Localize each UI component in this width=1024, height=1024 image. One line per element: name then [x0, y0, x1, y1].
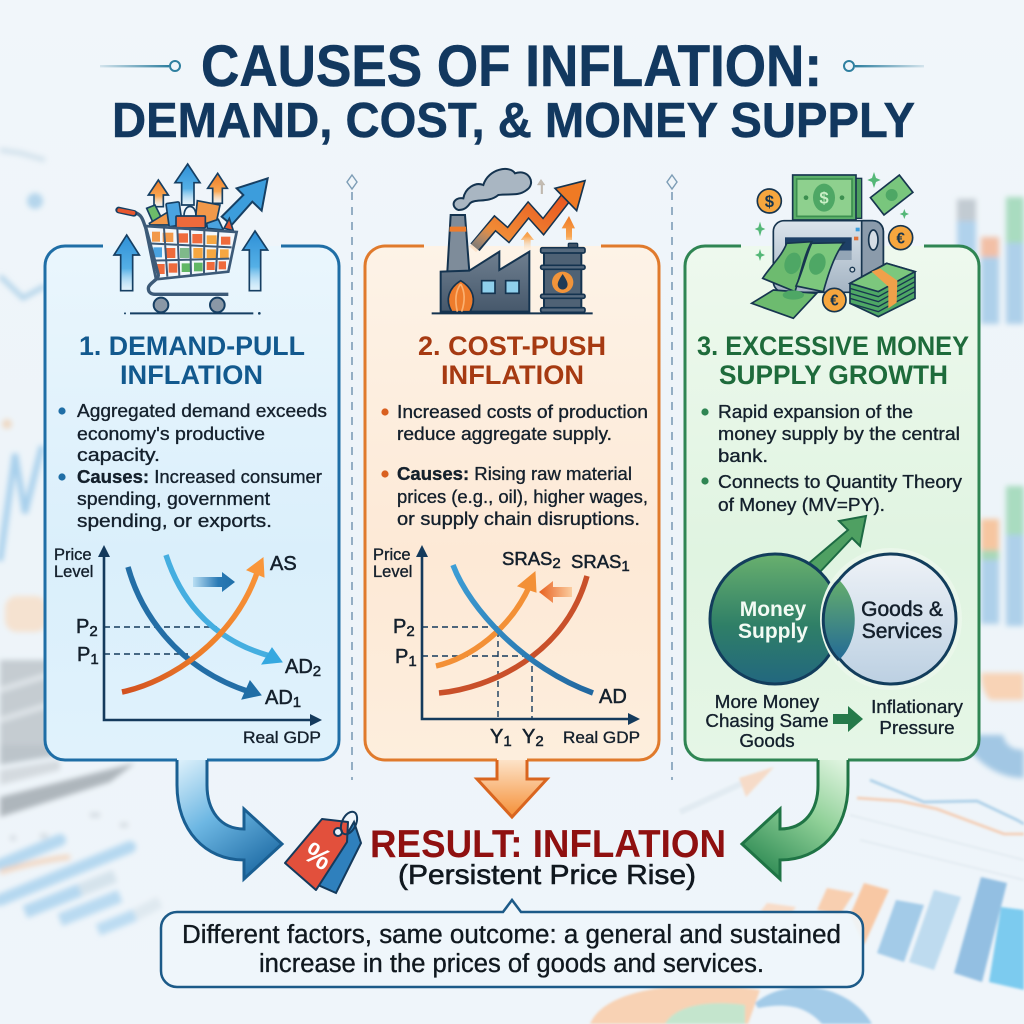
text block: definition and theory: money supply by the central [718, 423, 960, 444]
text block: definition and causes: capacity. [77, 444, 160, 465]
panel: demand-pull inflation [45, 164, 339, 760]
chart: SRAS shift: Y [490, 726, 503, 748]
title [100, 34, 924, 148]
text block: definition and causes: Causes: Increased consumer [77, 466, 322, 487]
faint arrow [680, 782, 745, 812]
chart: SRAS shift: 2 [535, 733, 544, 750]
dashed column dividers [347, 175, 677, 780]
chart: SRAS shift: P [393, 616, 406, 638]
chart: AD shift: AD [285, 656, 313, 678]
callout: more money chasing same goods leads to inflationary pressure: Goods [739, 730, 795, 751]
callout: summary: Different factors, same outcome: a general and sustained [182, 921, 841, 949]
text block: definition and theory: Rapid expansion of the [718, 401, 913, 422]
arrow: money supply to result [742, 760, 848, 879]
line chart [870, 780, 1024, 824]
diagram: money supply vs goods and services [710, 516, 962, 690]
chart: SRAS shift: SRAS [502, 548, 552, 569]
icon: money printer with bills and coins [752, 172, 915, 318]
diagram: money supply vs goods and services: Services [862, 620, 942, 643]
title: CAUSES OF INFLATION: [201, 34, 822, 99]
chart: AD shift [54, 545, 322, 747]
diagram: money supply vs goods and services: Goods & [861, 598, 943, 621]
icon: factory, oil barrel and rising cost arrow [432, 169, 593, 313]
chart: SRAS shift: 1 [408, 653, 417, 670]
chart: SRAS shift: SRAS [571, 551, 621, 572]
text block: definition and causes [58, 400, 327, 531]
callout: summary: increase in the prices of goods and services. [259, 950, 764, 978]
panel: excessive money supply growth [685, 172, 979, 760]
icon: shopping cart with rising arrows [114, 164, 268, 315]
chart: AD shift: P [77, 644, 90, 666]
text block: definition and causes: or supply chain disruptions. [397, 508, 640, 529]
text block: definition and causes: Aggregated demand exceeds [77, 400, 327, 421]
chart: AD shift: P [76, 616, 89, 638]
text block: definition and causes: Increased costs of production [397, 401, 648, 422]
chart: SRAS shift: P [395, 646, 408, 668]
text block: definition and causes: reduce aggregate supply. [397, 423, 612, 444]
text block: definition and causes: economy's productive [77, 423, 265, 444]
heading: 1. DEMAND-PULL [79, 331, 305, 361]
text block: definition and causes: spending, or exports. [77, 510, 272, 531]
text block: definition and causes: Causes: Rising raw material [397, 463, 632, 484]
text block: definition and causes: spending, government [77, 488, 271, 509]
chart: SRAS shift: Price [373, 546, 411, 564]
diagram: money supply vs goods and services: Money [740, 598, 807, 621]
icon: price tag with percent: % [298, 836, 337, 877]
diagram: money supply vs goods and services: Supply [738, 620, 808, 643]
heading: INFLATION [120, 360, 263, 390]
chart: SRAS shift [373, 545, 640, 750]
panel: cost-push inflation [365, 169, 659, 760]
chart: SRAS shift: 2 [406, 623, 415, 640]
icon: money printer with bills and coins: $ [819, 188, 829, 207]
callout: more money chasing same goods leads to inflationary pressure [705, 691, 964, 751]
chart: AD shift: 2 [313, 663, 321, 680]
chart: SRAS shift: 1 [503, 733, 512, 750]
chart: SRAS shift: 2 [552, 555, 561, 572]
heading: INFLATION [441, 360, 584, 390]
icon: money printer with bills and coins: € [896, 230, 905, 247]
icon: price tag with percent [285, 809, 361, 893]
callout: more money chasing same goods leads to inflationary pressure: Pressure [879, 717, 955, 738]
chart: SRAS shift: Y [522, 726, 535, 748]
icon: money printer with bills and coins: $ [765, 192, 775, 211]
chart: AD shift: 1 [90, 651, 99, 668]
bottom-right bars [817, 888, 854, 915]
text block: definition and theory: Connects to Quantity Theory [718, 471, 963, 492]
icon: money printer with bills and coins: € [830, 293, 839, 310]
result heading: (Persistent Price Rise) [398, 859, 696, 890]
text block: definition and causes [381, 401, 648, 529]
heading: SUPPLY GROWTH [719, 360, 948, 390]
chart: SRAS shift: AD [599, 686, 627, 708]
title: DEMAND, COST, & MONEY SUPPLY [112, 94, 915, 148]
arrow: demand-pull to result [177, 760, 282, 879]
heading [697, 331, 969, 390]
heading: 3. EXCESSIVE MONEY [697, 331, 969, 361]
text block: definition and theory: of Money (MV=PY). [718, 494, 885, 515]
result heading [370, 823, 726, 890]
chart: AD shift: 1 [293, 694, 301, 711]
text block: definition and causes: prices (e.g., oil), higher wages, [397, 486, 648, 507]
chart: AD shift: 2 [89, 623, 98, 640]
heading: 2. COST-PUSH [418, 331, 606, 361]
left edge [0, 150, 45, 160]
chart: AD shift: AS [270, 553, 297, 575]
heading [79, 331, 305, 390]
chart: SRAS shift: Real GDP [563, 729, 640, 747]
chart: AD shift: Level [54, 563, 93, 581]
result heading: RESULT: INFLATION [370, 823, 726, 866]
chart: AD shift: AD [265, 687, 293, 709]
callout: more money chasing same goods leads to inflationary pressure: Chasing Same [705, 710, 829, 731]
callout: more money chasing same goods leads to inflationary pressure: Inflationary [871, 696, 964, 717]
right edge bars [957, 199, 976, 259]
chart: SRAS shift: Level [373, 563, 412, 581]
text block: definition and theory [701, 401, 963, 515]
callout: summary [161, 900, 863, 987]
bottom-left bars [0, 840, 60, 865]
chart: SRAS shift: 1 [621, 558, 630, 575]
heading [418, 331, 606, 390]
bottom pie [590, 985, 760, 1024]
chart: AD shift: Real GDP [243, 729, 321, 747]
arrow: cost-push to result [477, 760, 547, 817]
text block: definition and theory: bank. [718, 445, 768, 466]
chart: AD shift: Price [54, 546, 92, 564]
callout: more money chasing same goods leads to inflationary pressure: More Money [715, 691, 820, 712]
